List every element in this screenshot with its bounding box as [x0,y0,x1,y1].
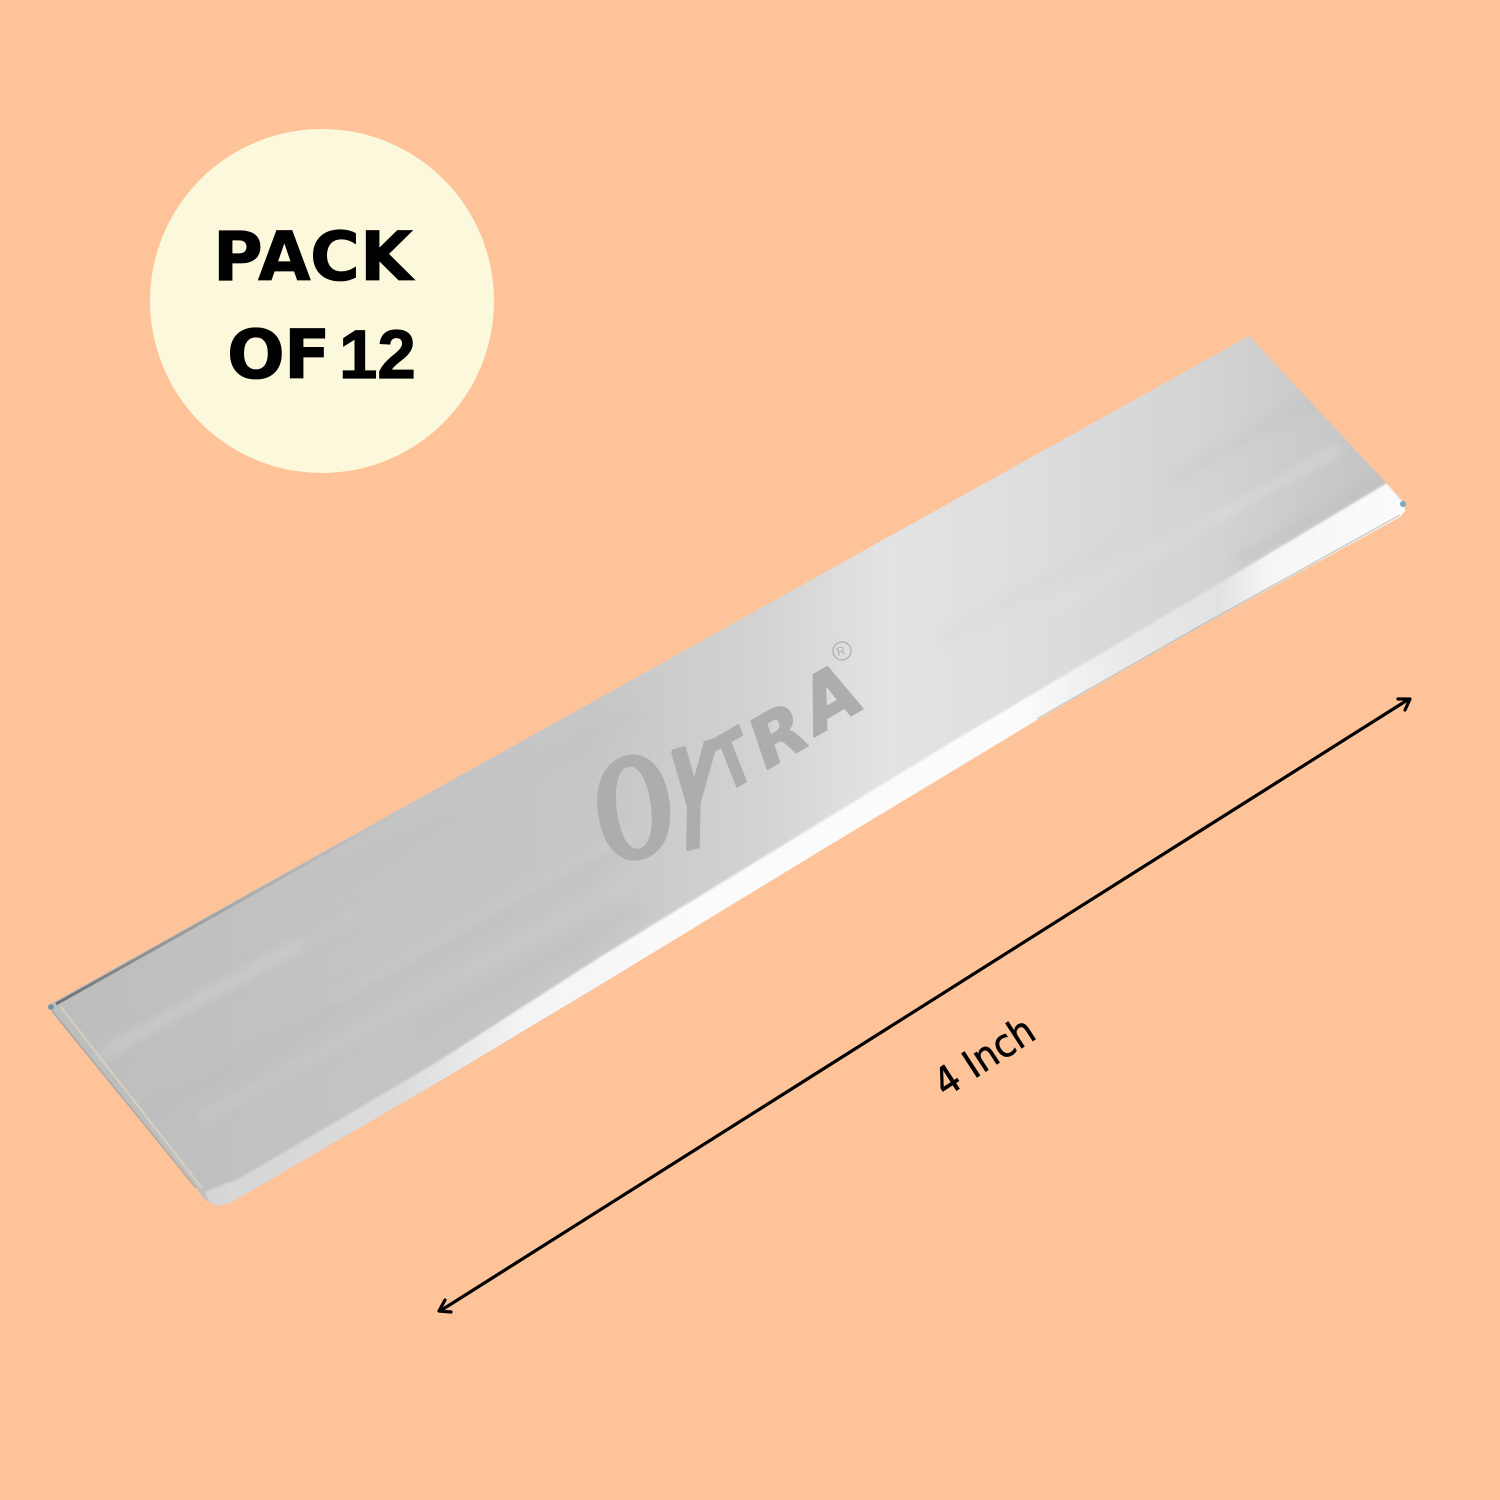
steel blade [40,320,1420,1220]
badge: pack of 12 [150,129,494,473]
dimension arrow [439,699,1410,1312]
logo watermark: R [735,688,822,784]
badge: pack of 12: OF [227,316,330,395]
logo watermark: T [696,713,774,807]
badge: pack of 12: PACK [213,218,415,297]
logo watermark: A [780,647,877,752]
registered mark [833,642,851,660]
badge: pack of 12: 12 [339,316,416,393]
logo watermark: Y [670,713,718,887]
logo watermark [574,647,877,897]
blade bevel [205,483,1410,1215]
registered mark: R [835,643,847,659]
dimension label: 4 Inch [926,1008,1044,1106]
logo watermark: O [574,717,692,897]
